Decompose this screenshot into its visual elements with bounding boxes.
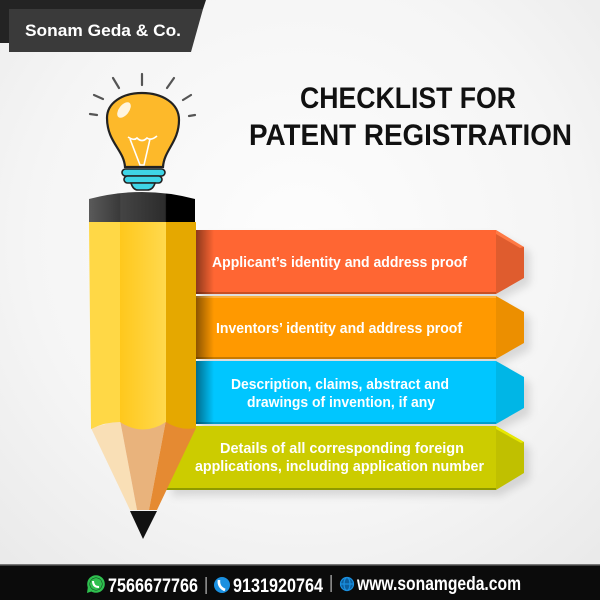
ribbon: foreign applications — [166, 426, 524, 490]
pencil eraser cap — [89, 192, 195, 222]
label — [195, 440, 484, 475]
label: Details of all corresponding foreign — [220, 440, 464, 457]
ribbon shadows — [172, 236, 530, 496]
footer bar — [0, 564, 600, 600]
phone number one: 7566677766 — [108, 576, 198, 597]
title: PATENT REGISTRATION — [249, 119, 572, 152]
bulb highlight — [115, 100, 133, 120]
label: applications, including application number — [195, 458, 484, 475]
ribbon: description — [196, 361, 524, 424]
pencil lead — [130, 511, 157, 539]
label: Applicant’s identity and address proof — [212, 254, 468, 271]
phone number two: 9131920764 — [233, 576, 323, 597]
icon: whatsapp — [87, 576, 104, 593]
title: CHECKLIST FOR — [300, 82, 516, 115]
ribbon: applicant proof — [196, 230, 524, 294]
label — [231, 376, 449, 411]
pencil — [89, 192, 196, 539]
company name: Sonam Geda & Co. — [25, 22, 181, 40]
icon: light bulb — [90, 74, 195, 190]
label: Description, claims, abstract and — [231, 376, 449, 393]
title — [249, 82, 572, 152]
bulb filament — [128, 136, 157, 165]
bulb base — [122, 169, 165, 190]
label: drawings of invention, if any — [247, 394, 436, 411]
pencil yellow body — [89, 222, 196, 430]
pencil wood tip — [91, 420, 196, 510]
ribbon: inventors proof — [196, 296, 524, 359]
icon: phone — [214, 577, 230, 593]
label: Inventors’ identity and address proof — [216, 320, 463, 337]
header badge — [0, 0, 206, 52]
icon: globe — [340, 578, 354, 590]
bulb rays — [90, 74, 195, 116]
website: www.sonamgeda.com — [356, 574, 521, 595]
bulb glass — [107, 93, 179, 167]
